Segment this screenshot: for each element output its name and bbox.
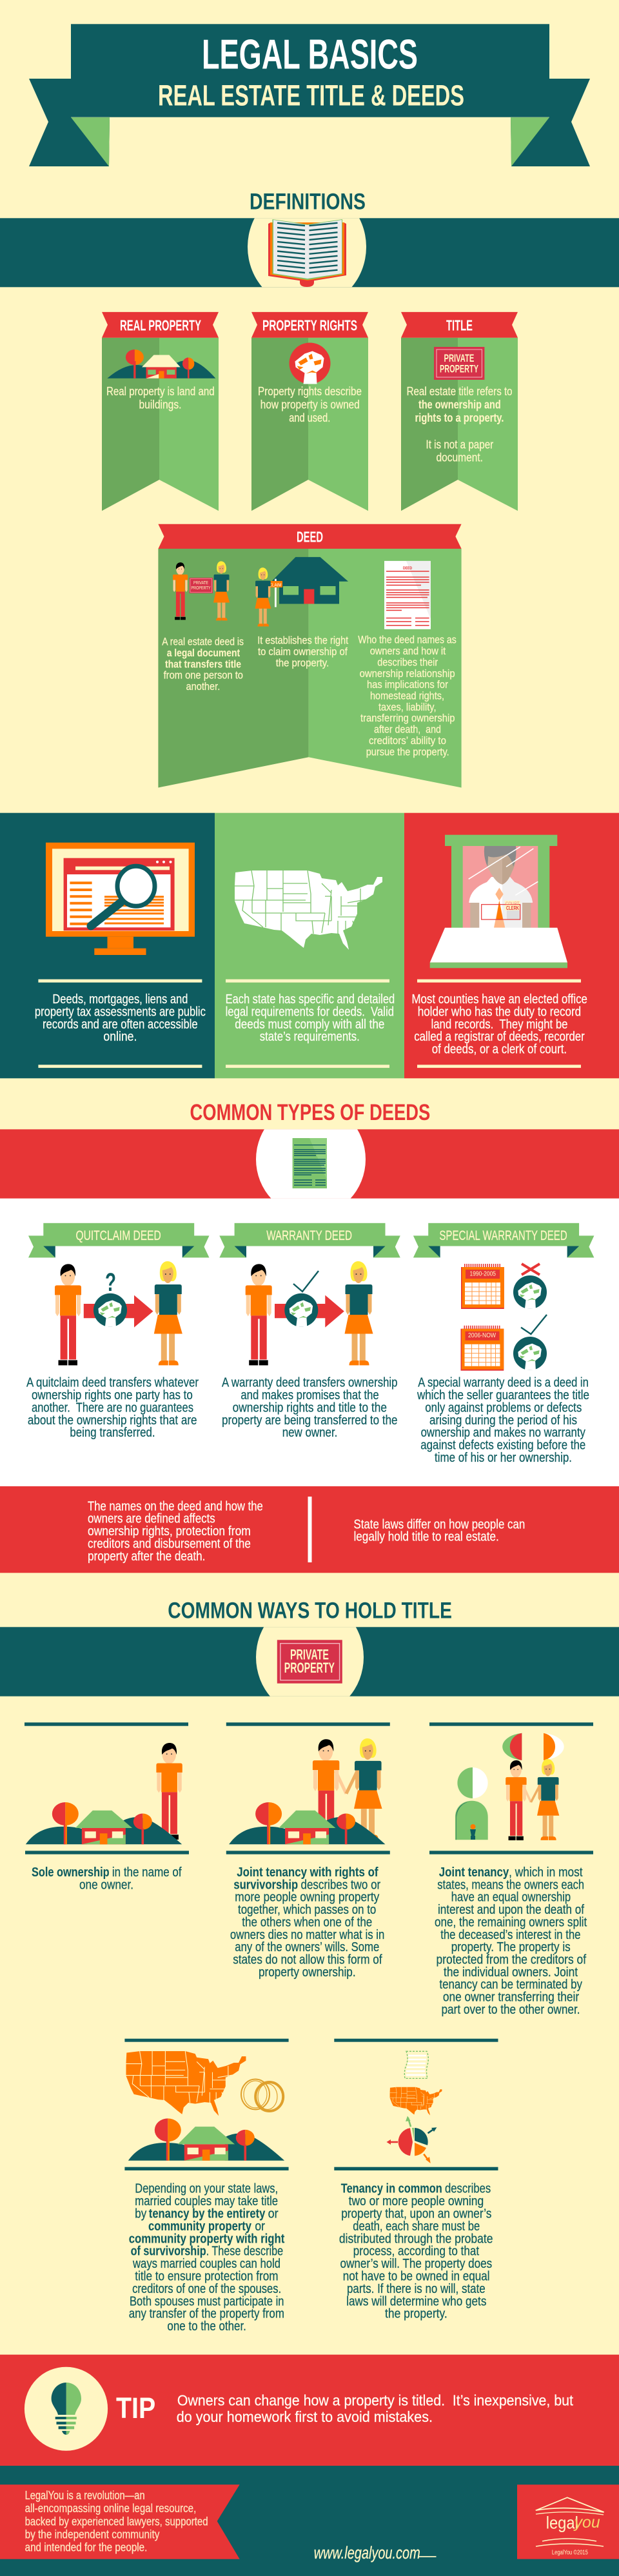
text: joint tenancy: tenancy can be terminated by <box>439 1978 582 1992</box>
text: tip message: do your homework first to avoid mistakes. <box>177 2408 433 2425</box>
text: joint tenancy with survivorship: any of the owners’ wills. Some <box>235 1940 379 1954</box>
column: quitclaim deed <box>26 1223 209 1440</box>
icon: dashed will scroll <box>404 2051 428 2078</box>
text: special warranty deed: ownership and makes no warranty <box>421 1426 585 1440</box>
panel: state requirements <box>215 813 404 1078</box>
ribbon: quitclaim deed: QUITCLAIM DEED <box>76 1228 161 1243</box>
text: tip message: Owners can change how a property is titled. It’s inexpensive, but <box>177 2392 573 2409</box>
text: married couples: tenancy by the entirety <box>149 2207 266 2221</box>
heading: real property: REAL PROPERTY <box>120 317 201 334</box>
icon: deed document <box>384 561 431 629</box>
icon: transfer with question mark <box>55 1261 182 1365</box>
title banner <box>29 24 590 166</box>
icon: clerk at window <box>430 835 567 968</box>
text: joint tenancy <box>435 1865 587 2017</box>
text: quitclaim deed: ownership rights one party has to <box>32 1388 193 1402</box>
text: joint tenancy: the individual owners. Joint <box>444 1965 578 1980</box>
heading: title: TITLE <box>446 317 473 334</box>
icon: private property sign large: PRIVATE <box>290 1646 329 1662</box>
icon: orange us map <box>126 2051 246 2116</box>
website url: www.legalyou.com <box>314 2543 420 2562</box>
text: joint tenancy with survivorship: states do not allow this form of <box>233 1952 382 1967</box>
text: deed column 1: a legal document <box>167 647 240 659</box>
icon: couple splitting deceased interest <box>455 1733 564 1840</box>
text: warranty deed <box>222 1376 397 1440</box>
text: quitclaim deed: A quitclaim deed transfers whatever <box>26 1376 199 1390</box>
text: deed column 3: describes their <box>377 656 438 668</box>
text: warranty deed: and makes promises that the <box>241 1388 379 1402</box>
about flag <box>0 2484 240 2559</box>
text: married couples: any transfer of the property from <box>129 2307 284 2321</box>
rule top <box>38 979 202 983</box>
text: warranty deed: property are being transferred to the <box>222 1413 397 1428</box>
text: joint tenancy: the deceased’s interest in the <box>440 1928 580 1942</box>
hold title band <box>0 1627 619 1696</box>
about flag: and intended for the people. <box>25 2541 147 2554</box>
text: special warranty deed: time of his or her ownership. <box>435 1451 572 1465</box>
text: state laws differ: legally hold title to real estate. <box>353 1530 499 1544</box>
text: married couples: or <box>268 2207 279 2221</box>
panel: footer <box>0 2466 619 2576</box>
text: tenancy in common: describes <box>445 2182 491 2196</box>
text: joint tenancy with survivorship: property ownership. <box>259 1965 356 1980</box>
text: deed column 3: pursue the property. <box>366 745 449 758</box>
text: deed column 3: ownership relationship <box>360 667 455 680</box>
heading: definitions: DEFINITIONS <box>250 189 366 215</box>
icon: woman claiming house: CLAIM <box>270 582 281 587</box>
icon: private property sign: PRIVATE <box>444 352 474 364</box>
heading: deed: DEED <box>297 529 323 546</box>
icon: private property sign: PROPERTY <box>440 362 478 375</box>
text: county clerk: Most counties have an elected office <box>411 992 587 1007</box>
icon: deed document: DEED <box>403 566 412 571</box>
callout band: names and state laws <box>0 1486 619 1573</box>
text: property rights definition: how property is owned <box>260 398 360 411</box>
text: deed column 2: to claim ownership of <box>258 645 348 658</box>
text: joint tenancy: , which in most <box>509 1865 583 1880</box>
text: deed column 2: It establishes the right <box>257 634 348 647</box>
panel: joint tenancy <box>429 1722 593 2017</box>
text: joint tenancy with survivorship: Joint tenancy with rights of <box>237 1865 378 1880</box>
text: warranty deed: ownership rights and title to the <box>233 1401 387 1415</box>
panel: joint tenancy with survivorship <box>226 1722 390 1980</box>
text: special warranty deed: only against problems or defects <box>425 1401 582 1415</box>
panel: tip <box>0 2355 619 2466</box>
text: married couples: of survivorship <box>131 2245 206 2259</box>
panel: tenancy in common <box>334 2039 498 2321</box>
icon: monitor with magnifier <box>46 843 195 955</box>
text: joint tenancy with survivorship <box>230 1865 384 1980</box>
text: joint tenancy: protected from the creditors of <box>436 1952 586 1967</box>
text: public records: property tax assessments are public <box>35 1005 206 1019</box>
ribbon: warranty deed <box>219 1223 400 1257</box>
icon: transfer with question mark: ? <box>105 1268 116 1297</box>
text: deed column 1: that transfers title <box>165 658 241 670</box>
text: tenancy in common: owner’s will. The property does <box>340 2257 492 2271</box>
text: sole ownership: in the name of <box>112 1865 182 1880</box>
text: title definition: rights to a property. <box>415 411 504 424</box>
icon: owners with sign: PROPERTY <box>191 585 210 591</box>
icon: calendar 1990-2005 rejected <box>461 1264 547 1309</box>
text: married couples: community property with right <box>129 2232 285 2246</box>
text: real property definition <box>106 385 215 411</box>
text: title definition: document. <box>436 451 483 464</box>
text: joint tenancy: one, the remaining owners split <box>435 1915 587 1929</box>
text: joint tenancy: part over to the other owner. <box>441 2003 580 2017</box>
text: married couples: or <box>255 2219 265 2234</box>
text: special warranty deed: arising during the period of his <box>429 1413 577 1428</box>
text: deed column 1: from one person to <box>164 669 243 682</box>
text: special warranty deed: A special warranty deed is a deed in <box>418 1376 589 1390</box>
text: state laws differ: State laws differ on how people can <box>353 1517 525 1531</box>
text: public records: Deeds, mortgages, liens and <box>52 992 188 1007</box>
text: married couples: community property <box>148 2219 252 2234</box>
text: joint tenancy with survivorship: describes two or <box>300 1878 380 1892</box>
title: legal basics: LEGAL BASICS <box>202 31 418 78</box>
text: real property definition: buildings. <box>139 398 182 411</box>
rule bottom <box>226 1065 389 1068</box>
rule top <box>226 979 389 983</box>
logo: legalyou: legal <box>546 2513 578 2533</box>
panel: real property <box>102 312 219 511</box>
icon: clerk at window: COURT <box>506 900 520 907</box>
white section background <box>0 1129 619 1486</box>
rule top <box>417 979 581 983</box>
text: deed column 3: has implications for <box>367 678 448 691</box>
text: property rights definition: and used. <box>289 411 330 424</box>
text: quitclaim deed: being transferred. <box>70 1426 155 1440</box>
text: special warranty deed <box>417 1376 589 1465</box>
text: tip message <box>177 2392 573 2425</box>
ribbon: quitclaim deed <box>28 1223 209 1257</box>
text: joint tenancy with survivorship: owners dies no matter what is in <box>230 1928 384 1942</box>
text: title definition <box>407 385 513 464</box>
text: state requirements: deeds must comply with all the <box>235 1018 384 1032</box>
about flag: backed by experienced lawyers, supported <box>25 2515 208 2528</box>
text: joint tenancy with survivorship: survivorship <box>233 1878 298 1892</box>
text: deed column 2 <box>257 634 348 669</box>
text: deed column 3 <box>358 634 457 758</box>
panel: sole ownership <box>25 1722 189 1892</box>
about flag: all-encompassing online legal resource, <box>25 2502 196 2515</box>
text: names on the deed <box>88 1499 263 1564</box>
text: title definition: Real estate title refers to <box>407 385 513 398</box>
text: quitclaim deed: another. There are no guarantees <box>32 1401 193 1415</box>
text: sole ownership: one owner. <box>79 1878 133 1892</box>
icon: us map <box>235 870 382 950</box>
text: names on the deed: property after the death. <box>88 1549 205 1564</box>
text: names on the deed: ownership rights, protection from <box>88 1524 251 1539</box>
text: deed column 2: the property. <box>276 656 329 669</box>
text: warranty deed: new owner. <box>282 1426 337 1440</box>
text: tenancy in common: process, according to that <box>353 2245 479 2259</box>
text: names on the deed: The names on the deed and how the <box>88 1499 263 1513</box>
text: deed column 1: another. <box>186 680 220 693</box>
column: special warranty deed <box>413 1223 594 1465</box>
about flag: by the independent community <box>25 2528 159 2541</box>
icon: private property sign large <box>277 1640 342 1684</box>
icon: wedding rings <box>241 2079 283 2111</box>
icon: raised fist <box>289 343 330 384</box>
text: tenancy in common: distributed through the probate <box>339 2232 493 2246</box>
deed types band <box>0 1129 619 1199</box>
text: married couples: one to the other. <box>167 2319 246 2334</box>
text: tenancy in common: two or more people owning <box>349 2194 484 2208</box>
panel: married couples <box>124 2039 289 2334</box>
logo: legalyou: LegalYou ©2015 <box>552 2550 588 2557</box>
logo: legalyou <box>517 2484 619 2559</box>
panel: county clerk <box>404 813 619 1078</box>
text: deed column 3: taxes, liability, <box>378 701 436 713</box>
panel: title <box>401 312 518 511</box>
panel: deed <box>158 524 462 788</box>
heading: common types of deeds: COMMON TYPES OF DEEDS <box>190 1100 430 1125</box>
text: sole ownership: Sole ownership <box>32 1865 110 1880</box>
text: deed column 3: homestead rights, <box>370 690 444 702</box>
text: county clerk <box>411 992 587 1057</box>
icon: calendar 2006-now approved <box>460 1315 547 1371</box>
definitions band <box>0 218 619 288</box>
icon: light bulb <box>25 2367 108 2451</box>
column: warranty deed <box>219 1223 400 1440</box>
ribbon: warranty deed: WARRANTY DEED <box>266 1228 352 1243</box>
icon: clerk at window: CLERK <box>506 905 519 911</box>
text: joint tenancy: have an equal ownership <box>451 1891 571 1905</box>
text: names on the deed: owners are defined affects <box>88 1512 215 1526</box>
text: state requirements: Each state has specific and detailed <box>226 992 395 1007</box>
text: quitclaim deed <box>26 1376 199 1440</box>
text: county clerk: of deeds, or a clerk of court. <box>432 1043 567 1057</box>
text: public records <box>35 992 206 1044</box>
text: title definition: the ownership and <box>418 398 501 411</box>
text: deed column 3: owners and how it <box>370 645 446 657</box>
text: deed column 3: Who the deed names as <box>358 634 457 646</box>
icon: calendar 1990-2005 rejected: 1990-2005 <box>469 1271 496 1278</box>
icon: open book <box>268 219 346 287</box>
panel: public records <box>0 813 215 1078</box>
text: property rights definition <box>258 385 362 424</box>
icon: owners with sign <box>173 561 230 620</box>
text: tenancy in common: not have to be owned in equal <box>343 2270 490 2284</box>
text: special warranty deed: which the seller guarantees the title <box>417 1388 589 1402</box>
chart: pie with arrows <box>387 2116 437 2163</box>
icon: private property sign large: PROPERTY <box>284 1660 335 1676</box>
text: county clerk: called a registrar of deeds, recorder <box>414 1030 585 1044</box>
text: tenancy in common: laws will determine who gets <box>346 2294 486 2308</box>
icon: private property sign <box>434 347 484 380</box>
text: married couples: . These describe <box>206 2245 283 2259</box>
text: state laws differ <box>353 1517 525 1544</box>
text: married couples: creditors of one of the spouses. <box>132 2282 281 2296</box>
text: county clerk: land records. They might be <box>431 1018 567 1032</box>
text: tenancy in common: property that, upon an owner’s <box>341 2207 491 2221</box>
text: real property definition: Real property is land and <box>106 385 215 398</box>
icon: house on hills <box>107 349 215 379</box>
text: joint tenancy with survivorship: the others when one of the <box>242 1915 372 1929</box>
rule bottom <box>38 1065 202 1068</box>
text: married couples: Both spouses must participate in <box>130 2294 284 2308</box>
text: quitclaim deed: about the ownership rights that are <box>28 1413 197 1428</box>
text: deed column 1 <box>162 636 244 693</box>
text: joint tenancy: interest and upon the death of <box>438 1903 584 1917</box>
text: tenancy in common: death, each share must be <box>353 2219 480 2234</box>
text: married couples: Depending on your state laws, <box>135 2182 278 2196</box>
text: public records: records and are often accessible <box>43 1018 198 1032</box>
text: joint tenancy with survivorship: together, which passes on to <box>238 1903 376 1917</box>
text: state requirements <box>226 992 395 1044</box>
text: title definition: It is not a paper <box>426 438 493 451</box>
text: state requirements: legal requirements for deeds. Valid <box>226 1005 394 1019</box>
text: county clerk: holder who has the duty to record <box>418 1005 581 1019</box>
logo: legalyou: you <box>573 2513 600 2532</box>
subtitle: REAL ESTATE TITLE & DEEDS <box>158 79 464 112</box>
text: married couples: by <box>135 2207 146 2221</box>
text: joint tenancy: property. The property is <box>451 1940 571 1954</box>
text: tenancy in common: Tenancy in common <box>341 2182 442 2196</box>
text: state requirements: state’s requirements. <box>260 1030 360 1044</box>
icon: small us map <box>390 2087 442 2116</box>
text: special warranty deed: against defects existing before the <box>420 1438 585 1452</box>
text: joint tenancy: Joint tenancy <box>439 1865 509 1880</box>
text: joint tenancy: one owner transferring their <box>443 1990 579 2004</box>
icon: transfer with check mark <box>246 1261 373 1365</box>
icon: house scene <box>128 2118 284 2161</box>
text: property rights definition: Property rights describe <box>258 385 362 398</box>
text: joint tenancy with survivorship: more people owning property <box>235 1891 379 1905</box>
text: tenancy in common: parts. If there is no will, state <box>347 2282 486 2296</box>
text: deed column 1: A real estate deed is <box>162 636 244 648</box>
text: tenancy in common: the property. <box>385 2307 447 2321</box>
about flag: LegalYou is a revolution—an <box>25 2489 145 2502</box>
text: married couples: ways married couples can hold <box>132 2257 280 2271</box>
heading: property rights: PROPERTY RIGHTS <box>262 317 357 334</box>
text: public records: online. <box>103 1030 137 1044</box>
icon: woman claiming house <box>255 557 348 626</box>
rule bottom <box>417 1065 581 1068</box>
icon: calendar 2006-now approved: 2006-NOW <box>468 1332 496 1339</box>
label: tip: TIP <box>116 2392 155 2424</box>
icon: green document <box>293 1138 327 1188</box>
panel: property rights <box>251 312 368 511</box>
text: warranty deed: A warranty deed transfers ownership <box>222 1376 397 1390</box>
text: deed column 3: after death, and <box>374 723 441 736</box>
text: deed column 3: creditors’ ability to <box>369 734 446 747</box>
ribbon: special warranty deed <box>413 1223 594 1257</box>
text: deed column 3: transferring ownership <box>360 712 455 724</box>
text: tenancy in common <box>339 2182 493 2321</box>
text: married couples: title to ensure protection from <box>135 2270 279 2284</box>
icon: owners with sign: PRIVATE <box>193 580 208 585</box>
text: names on the deed: creditors and disbursement of the <box>88 1537 251 1551</box>
text: sole ownership <box>32 1865 182 1892</box>
text: joint tenancy: states, means the owners each <box>437 1878 584 1892</box>
ribbon: special warranty deed: SPECIAL WARRANTY DEED <box>439 1228 567 1243</box>
text: married couples <box>129 2182 285 2334</box>
text: married couples: married couples may take title <box>135 2194 278 2208</box>
heading: common ways to hold title: COMMON WAYS TO HOLD TITLE <box>168 1598 452 1623</box>
icon: man with house <box>26 1743 182 1844</box>
icon: couple with house <box>229 1738 386 1844</box>
